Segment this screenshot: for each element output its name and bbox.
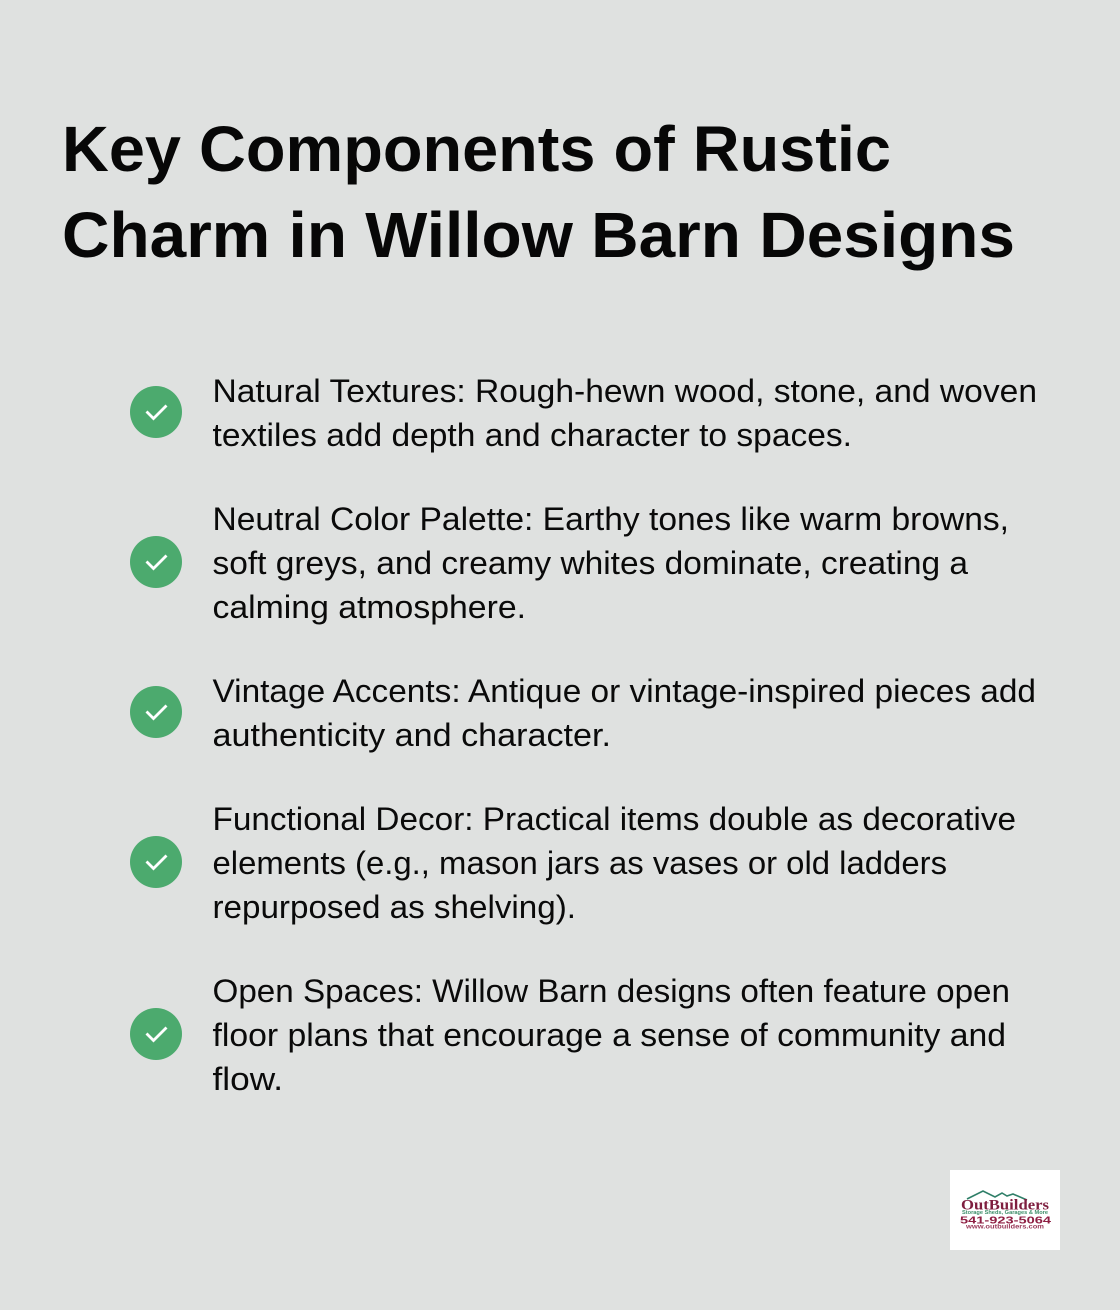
text: natural textures: textiles add depth and character to spaces.: [212, 417, 852, 453]
icon: check circle: [130, 386, 182, 438]
text: open spaces: [212, 973, 1010, 1097]
logo phone: 541-923-5064: [960, 1214, 1051, 1226]
logo: OutBuilders: [950, 1170, 1060, 1250]
text: open spaces: Open Spaces: Willow Barn designs often feature open: [212, 973, 1010, 1009]
text: functional decor: [212, 801, 1016, 925]
icon: check circle: [130, 1008, 182, 1060]
text: functional decor: elements (e.g., mason jars as vases or old ladders: [212, 845, 947, 881]
text: neutral color palette: [212, 501, 1009, 625]
title: Key Components of Rustic: [62, 113, 891, 185]
list item: open spaces: [130, 973, 1010, 1097]
icon: check circle: [130, 686, 182, 738]
list item: natural textures: [130, 373, 1037, 453]
icon: roof lines: [967, 1191, 1027, 1200]
text: vintage accents: [212, 673, 1036, 753]
title: [62, 113, 1015, 271]
text: neutral color palette: Neutral Color Palette: Earthy tones like warm browns,: [212, 501, 1009, 537]
list item: vintage accents: [130, 673, 1036, 753]
list item: functional decor: [130, 801, 1016, 925]
title: Charm in Willow Barn Designs: [62, 199, 1015, 271]
text: vintage accents: authenticity and character.: [212, 717, 611, 753]
text: neutral color palette: soft greys, and creamy whites dominate, creating a: [212, 545, 969, 581]
text: natural textures: [212, 373, 1037, 453]
text: open spaces: flow.: [212, 1061, 283, 1097]
icon: check circle: [130, 536, 182, 588]
text: neutral color palette: calming atmosphere.: [212, 589, 526, 625]
text: vintage accents: Vintage Accents: Antique or vintage-inspired pieces add: [212, 673, 1036, 709]
icon: check circle: [130, 836, 182, 888]
text: functional decor: repurposed as shelving).: [212, 889, 576, 925]
text: functional decor: Functional Decor: Practical items double as decorative: [212, 801, 1016, 837]
list item: neutral color palette: [130, 501, 1009, 625]
logo website: www.outbuilders.com: [965, 1224, 1044, 1230]
text: natural textures: Natural Textures: Rough-hewn wood, stone, and woven: [212, 373, 1037, 409]
logo tagline: Storage Sheds, Garages & More: [962, 1210, 1048, 1216]
logo name: OutBuilders: [961, 1198, 1049, 1214]
text: open spaces: floor plans that encourage a sense of community and: [212, 1017, 1006, 1053]
